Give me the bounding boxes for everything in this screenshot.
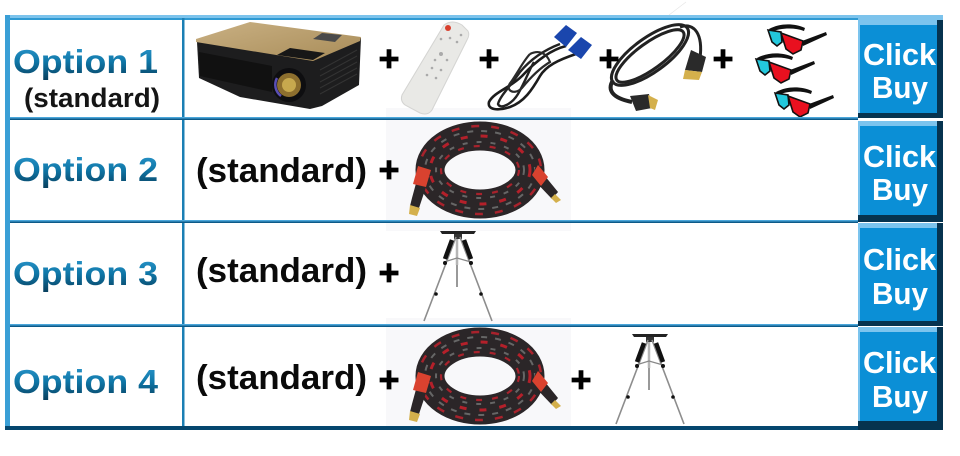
row 2 content: (standard) — [196, 152, 367, 190]
button row 2 — [858, 121, 943, 222]
row 3 content: (standard) — [196, 252, 367, 290]
row 2 content — [196, 126, 561, 216]
row 4 label: Option 4 — [13, 363, 159, 400]
row 4 content — [196, 332, 684, 424]
plus signs row 1 — [378, 38, 734, 79]
button row 3: Buy — [872, 276, 929, 311]
button row 1: Click — [863, 37, 937, 72]
row 1 label: Option 1 — [13, 43, 158, 80]
row 1 label: (standard) — [24, 83, 160, 113]
button row 4: Buy — [872, 379, 929, 414]
button row 3: Click — [863, 242, 937, 277]
row 3 content — [196, 231, 492, 321]
icon: tripod — [424, 231, 492, 321]
cable photo backdrop, row 2 — [386, 108, 571, 231]
icon: braided HDMI cable — [409, 126, 561, 216]
icon: HDMI cable — [603, 14, 706, 111]
row 4 content: (standard) — [196, 359, 367, 397]
plus signs row 1: + — [712, 38, 734, 79]
plus signs row 1: + — [378, 38, 400, 79]
button row 3 — [858, 223, 943, 326]
button row 1 — [858, 20, 943, 118]
icon: braided HDMI cable — [409, 332, 561, 422]
row 2 label: Option 2 — [13, 151, 158, 188]
row 4 content: + — [378, 359, 400, 400]
plus signs row 1: + — [598, 38, 620, 79]
row 2 content: + — [378, 149, 400, 190]
icon: projector — [196, 22, 361, 109]
icon: tripod — [616, 334, 684, 424]
button row 2: Click — [863, 139, 937, 174]
button row 1: Buy — [872, 70, 929, 105]
icon: 3D glasses — [756, 24, 834, 117]
icon: VGA cable — [489, 25, 592, 109]
button row 4 — [858, 327, 943, 430]
plus signs row 1: + — [478, 38, 500, 79]
cable photo backdrop, row 4 — [386, 318, 571, 426]
row 3 content: + — [378, 252, 400, 293]
row 1 label — [13, 43, 160, 113]
button row 4: Click — [863, 345, 937, 380]
row 4 content: + — [570, 359, 592, 400]
row 3 label: Option 3 — [13, 255, 158, 292]
button row 2: Buy — [872, 172, 929, 207]
icon: remote control — [401, 22, 469, 114]
